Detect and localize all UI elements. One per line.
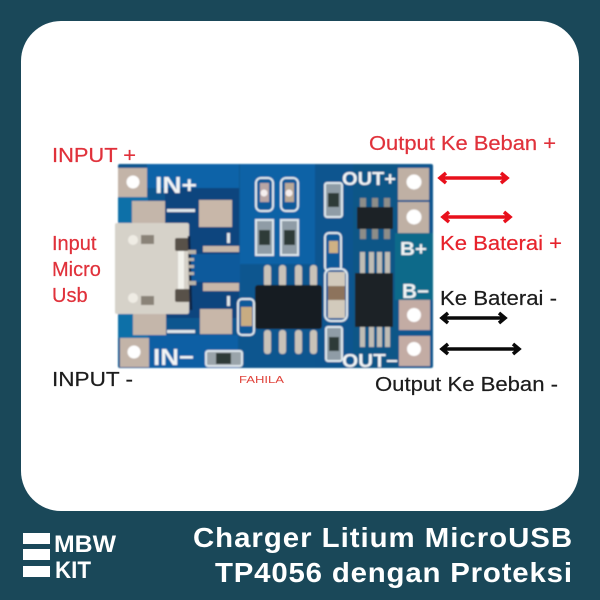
red labels: Ke Baterai +: [440, 233, 562, 255]
silkscreen labels: OUT+: [342, 169, 396, 189]
black labels: [52, 288, 558, 396]
logo text: MBW: [54, 531, 116, 558]
title: [193, 523, 572, 589]
terminal pads right: [398, 168, 430, 366]
title: Charger Litium MicroUSB: [193, 523, 572, 554]
watermark: FAHILA: [239, 375, 284, 386]
LEDs: [256, 178, 298, 211]
board substrate: [118, 164, 433, 368]
SOT chip: [357, 198, 393, 239]
title: TP4056 dengan Proteksi: [215, 558, 572, 589]
black labels: Output Ke Beban -: [375, 374, 558, 396]
red labels: Usb: [52, 285, 88, 307]
red labels: [52, 133, 562, 307]
logo text: [54, 531, 116, 584]
silkscreen labels: IN−: [153, 344, 194, 370]
logo: [23, 531, 116, 584]
red labels: INPUT +: [52, 145, 136, 167]
logo icon: stacked bars: [23, 533, 50, 577]
capacitors: [238, 233, 347, 335]
silkscreen labels: B−: [402, 281, 429, 303]
white panel: [21, 21, 579, 511]
arrow: battery plus: [443, 212, 510, 222]
silkscreen labels: [153, 169, 429, 371]
red labels: Micro: [52, 259, 101, 281]
circuit board: [115, 164, 433, 371]
arrow: battery minus: [442, 313, 505, 323]
arrow: output plus: [440, 173, 507, 183]
micro USB connector: [115, 201, 196, 335]
copper pads: [167, 200, 239, 334]
logo text: KIT: [55, 557, 91, 584]
terminal pads left: [118, 168, 149, 367]
silkscreen labels: B+: [400, 239, 427, 259]
MOSFET chip: [355, 252, 393, 347]
black labels: Ke Baterai -: [440, 288, 557, 310]
arrow: output minus: [442, 344, 519, 354]
red labels: Output Ke Beban +: [369, 133, 556, 155]
red labels: Input: [52, 233, 97, 255]
silkscreen labels: IN+: [155, 172, 197, 198]
black labels: INPUT -: [52, 369, 133, 391]
main IC: [255, 265, 322, 354]
small resistors: [206, 183, 342, 366]
silkscreen labels: OUT−: [342, 351, 398, 371]
